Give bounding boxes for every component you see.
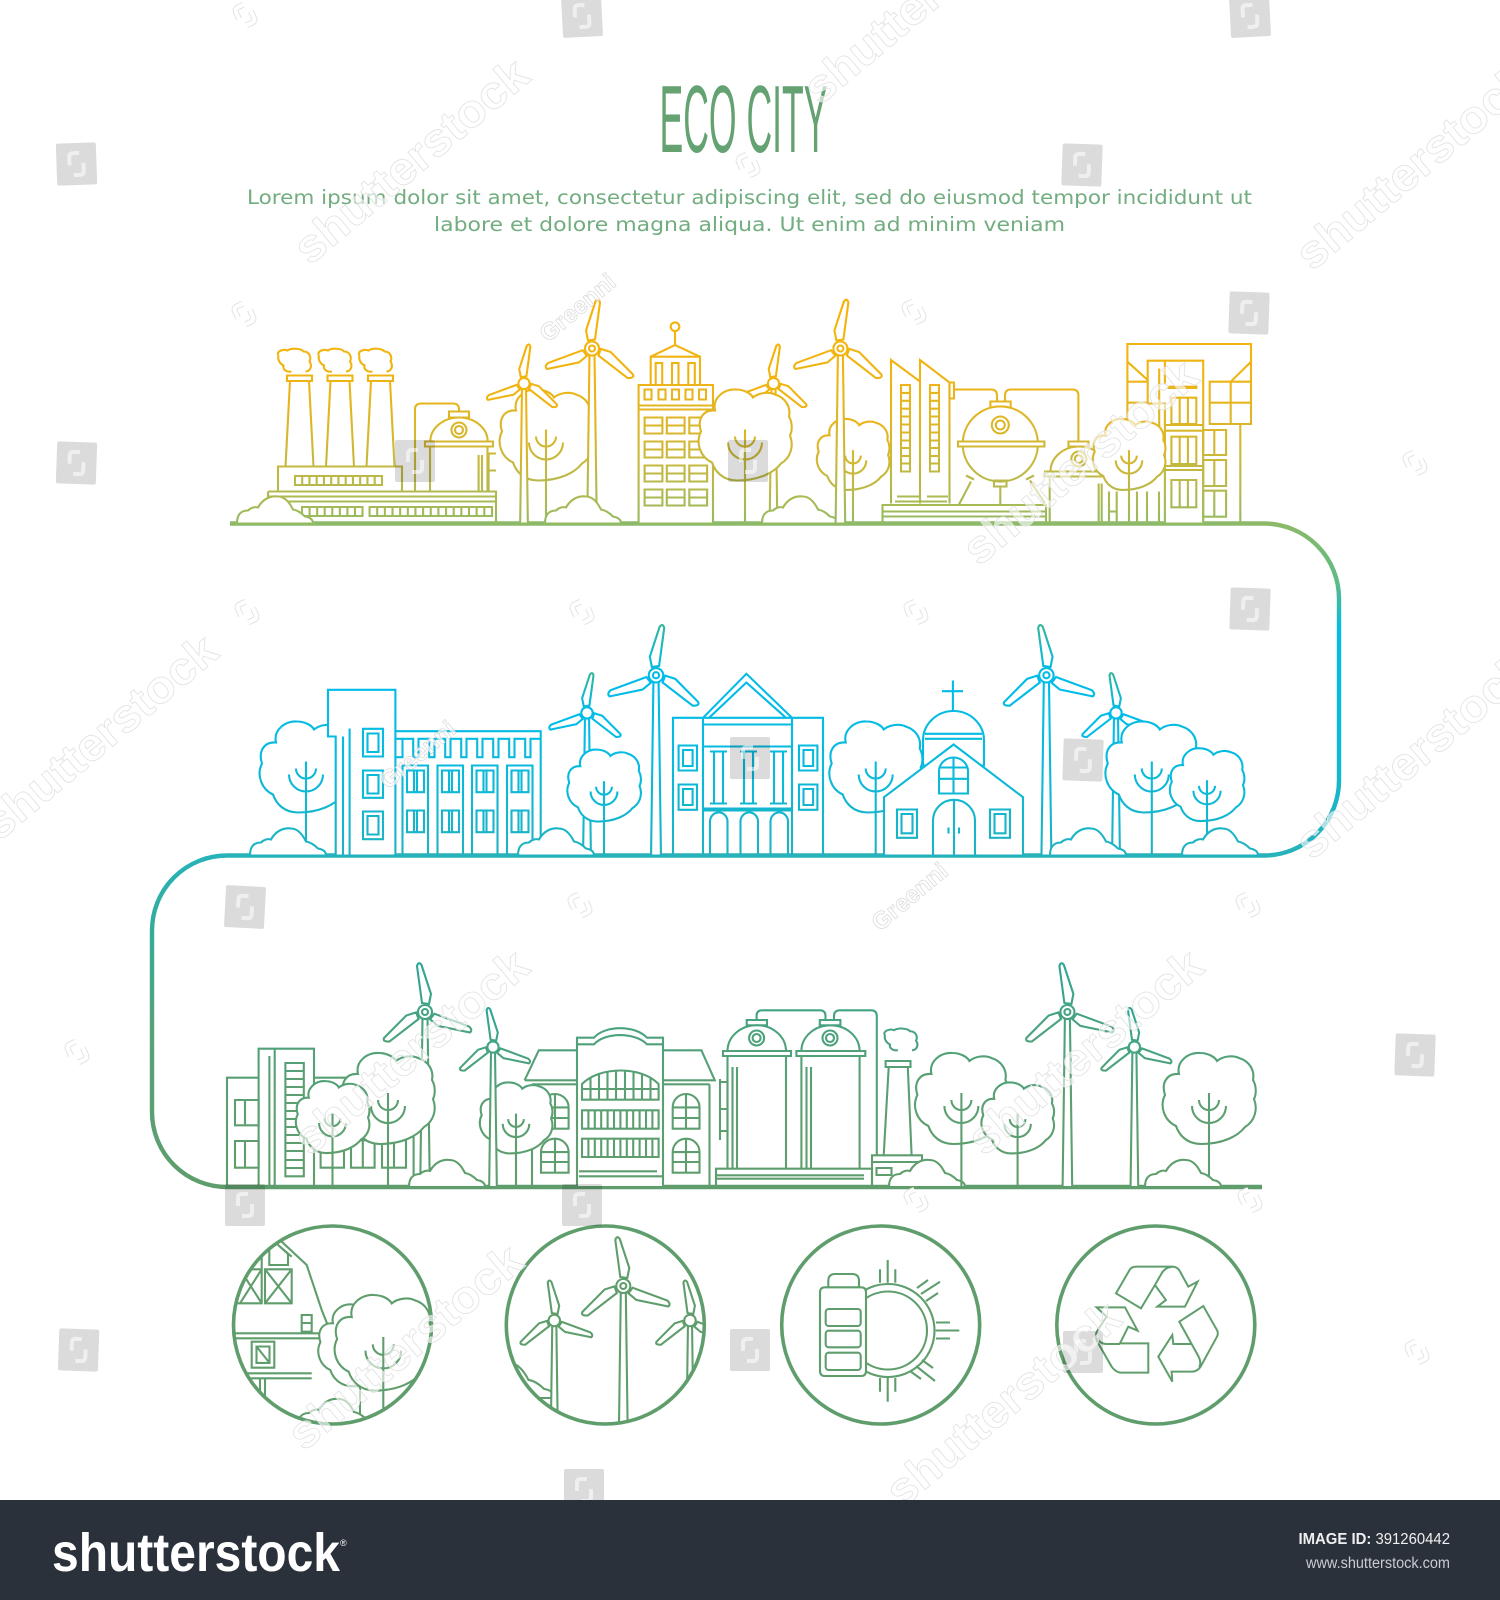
tree	[480, 1082, 552, 1187]
sun	[842, 1260, 959, 1402]
modern building	[1127, 344, 1251, 524]
intro text	[247, 186, 1252, 236]
image id: IMAGE ID: 391260442	[1298, 1531, 1450, 1548]
tree	[260, 721, 353, 856]
wind turbine	[736, 344, 807, 524]
wind turbine	[794, 300, 882, 524]
footer bar	[0, 1500, 1500, 1600]
recycle arrow right	[1158, 1306, 1218, 1382]
wind turbine	[549, 673, 621, 856]
watermark text: shutterstock	[283, 47, 539, 274]
watermark text: shutterstock	[952, 348, 1208, 575]
bush	[762, 496, 838, 524]
contributor watermark text	[375, 269, 953, 937]
bush	[1145, 1160, 1221, 1187]
wind turbine	[1101, 1008, 1171, 1187]
footer logo: shutterstock	[52, 1523, 341, 1583]
tree	[567, 750, 641, 856]
contributor watermark text: Greenni	[535, 269, 621, 348]
tree	[1163, 1053, 1256, 1187]
wind turbine	[460, 1008, 530, 1187]
church	[884, 680, 1023, 856]
watermark text: shutterstock	[957, 938, 1213, 1165]
tree	[817, 419, 889, 524]
tower block	[639, 322, 713, 524]
gas plant	[882, 360, 1078, 524]
wind turbine	[1082, 673, 1154, 856]
tree	[1093, 419, 1165, 524]
icon: wind turbines circle	[504, 1224, 706, 1426]
watermark text: shutterstock	[283, 938, 539, 1165]
battery	[820, 1274, 866, 1376]
bush	[518, 828, 594, 856]
tree	[500, 389, 593, 524]
recycle arrow left	[1096, 1307, 1148, 1373]
contributor watermark text: Greenni	[867, 858, 953, 937]
watermark text: shutterstock	[277, 1233, 533, 1460]
row 3: residential skyline	[227, 963, 1256, 1187]
wind turbine	[384, 963, 471, 1187]
icon: green building circle	[225, 1226, 432, 1436]
museum	[673, 674, 823, 856]
tree	[699, 389, 792, 524]
wind turbine	[1026, 963, 1114, 1187]
icon: recycle circle	[1057, 1226, 1255, 1424]
intro text: labore et dolore magna aliqua. Ut enim ad minim veniam	[434, 213, 1065, 236]
apartment blocks	[227, 1049, 414, 1187]
wind turbine	[608, 625, 699, 856]
tree	[296, 1081, 369, 1187]
bush	[889, 1160, 965, 1187]
wind turbine	[546, 300, 633, 524]
watermark text: shutterstock	[875, 1290, 1131, 1517]
row 2: civic skyline	[250, 625, 1258, 856]
serpentine connector line	[152, 524, 1339, 1187]
bush	[237, 496, 313, 524]
recycle arrow top	[1116, 1267, 1198, 1308]
row 1: industrial skyline	[237, 300, 1251, 524]
intro text: Lorem ipsum dolor sit amet, consectetur adipiscing elit, sed do eiusmod tempor incididunt ut	[247, 186, 1252, 209]
website: www.shutterstock.com	[1305, 1555, 1450, 1572]
bush	[545, 496, 621, 524]
bush	[1182, 828, 1258, 856]
factory	[268, 349, 496, 524]
text: ECO CITY	[660, 66, 828, 173]
contributor watermark text: Greenni	[375, 716, 461, 795]
tree	[829, 721, 922, 856]
wind turbine	[487, 344, 557, 524]
tree	[342, 1053, 435, 1187]
tree	[981, 1082, 1054, 1187]
bush	[1050, 828, 1126, 856]
icon: battery and sun circle	[782, 1226, 980, 1424]
office tower	[328, 690, 395, 856]
small tank	[1045, 442, 1159, 524]
silo plant	[716, 1010, 922, 1187]
tree	[1170, 748, 1244, 856]
bush	[409, 1160, 485, 1187]
long building	[395, 731, 541, 856]
wind turbine	[1004, 625, 1094, 856]
tree	[1105, 721, 1199, 856]
registered mark: ®	[340, 1538, 347, 1548]
bush	[250, 828, 326, 856]
tree	[915, 1053, 1008, 1187]
hall building	[525, 1028, 715, 1187]
